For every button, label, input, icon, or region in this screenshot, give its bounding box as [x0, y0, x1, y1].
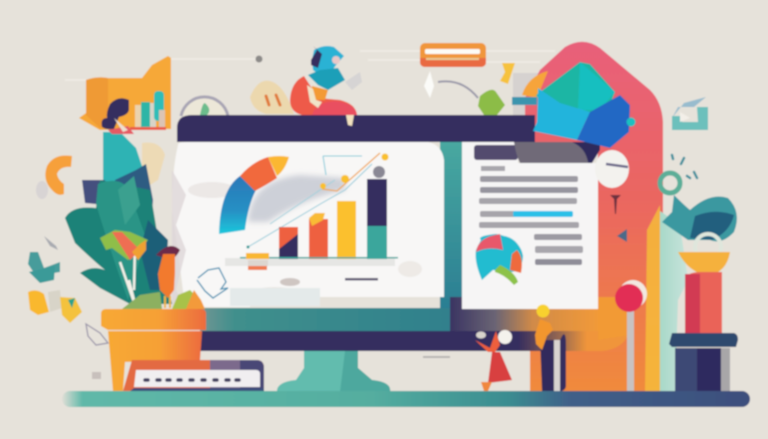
yellow bowl [678, 252, 730, 276]
icon: yellow hourglass [500, 63, 515, 84]
navy pedestal [669, 333, 738, 391]
pie chart [476, 234, 523, 285]
gauge arc: blue [219, 176, 256, 234]
scattered confetti icons [28, 236, 108, 379]
person: yellow figure [535, 304, 566, 391]
monitor stand [277, 351, 390, 392]
aqua decorative column [660, 211, 688, 391]
line chart [246, 153, 388, 248]
gauge arc: orange [240, 157, 277, 191]
icon: round gauge with small plant [181, 97, 228, 126]
monitor: lower navy band with orange corner [200, 331, 630, 351]
monitor: upper right band fading to orange [450, 297, 600, 331]
panel: right report screen [462, 142, 598, 309]
callout: orange title tag [420, 43, 486, 67]
red column [685, 272, 722, 333]
icon: green shape [478, 90, 505, 115]
network outline icon [197, 268, 228, 298]
icon: orange folder with chart [79, 56, 171, 130]
baseline [240, 257, 398, 258]
plant right: ring and leaf [660, 155, 737, 260]
bar 2 [309, 213, 328, 259]
panel: left chart screen [172, 142, 444, 307]
bar 1 [279, 227, 298, 259]
decorative thin lines [65, 51, 555, 80]
person: seated reader on monitor [290, 46, 362, 126]
icon: orange ring shape [36, 155, 72, 199]
icon: pale leaf sketch [250, 81, 294, 114]
icon: orange band beside gem [522, 71, 548, 98]
caption bar [345, 278, 378, 280]
monitor: lower teal band [200, 308, 460, 331]
icon: teal corner tag [672, 97, 708, 130]
plant: flower cluster [100, 230, 148, 260]
gauge backdrop [248, 175, 345, 222]
plant: large teal leaves [65, 176, 172, 308]
person: girl in red dress [475, 330, 512, 391]
red ball signpost [615, 280, 647, 391]
plant pot [101, 309, 206, 391]
bar 3 [337, 201, 356, 259]
legend chips [246, 253, 269, 270]
person: small orange figure [156, 246, 180, 308]
yellow stripe on tower [645, 205, 660, 391]
icon: small navy pin on tower [610, 195, 621, 214]
keyboard panel [123, 360, 264, 391]
icon: curved arrow [438, 81, 478, 98]
small wrench line [423, 356, 450, 358]
pale box behind the gem [513, 73, 543, 115]
bar 4 [367, 166, 387, 259]
icon: navy triangle on tower [617, 229, 627, 242]
monitor: top bezel [177, 115, 535, 142]
highlighted row [513, 211, 573, 217]
monitor: grey notch above report panel [514, 142, 600, 163]
icon: blue teal gem [512, 62, 636, 148]
person: woman with dark hair [82, 98, 153, 240]
plant: small leaves above pot [122, 290, 205, 309]
monitor: teal screen backing [440, 142, 470, 312]
icon: grey dot [256, 56, 262, 62]
icon: white clock badge [595, 150, 629, 188]
icon: white diamond [424, 71, 434, 98]
gauge arc: yellow [268, 156, 289, 176]
floor bar [62, 391, 750, 407]
orange neck beside right panel [598, 297, 630, 340]
house shape: red tower behind the monitor [525, 42, 663, 391]
icon: pale bulb behind woman [142, 142, 165, 185]
